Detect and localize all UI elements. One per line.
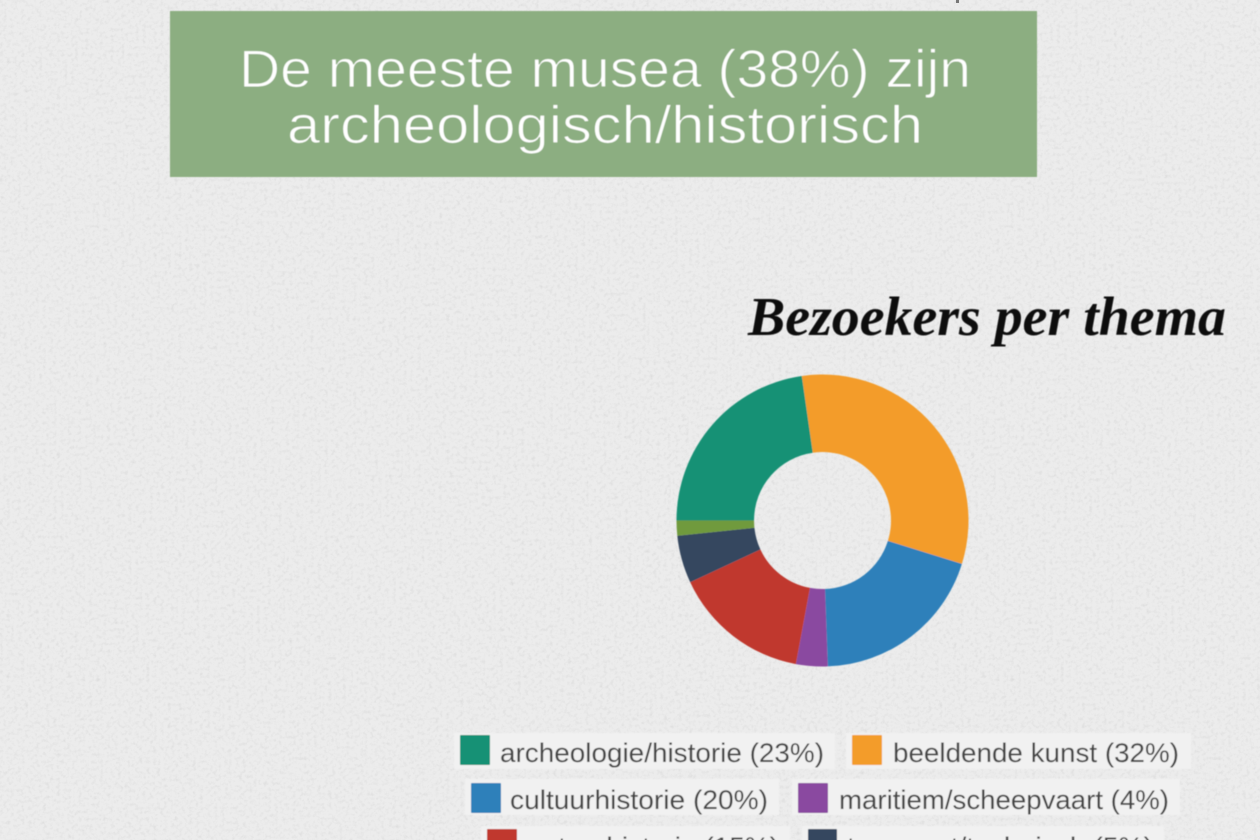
slice: maritiem/scheepvaart 4% <box>796 588 828 667</box>
slice: natuurhistorie 15% <box>690 550 810 664</box>
title text: archeologisch/historisch <box>287 96 923 155</box>
slice: beeldende kunst 32% <box>802 375 968 564</box>
top edge tick <box>956 0 959 3</box>
legend item: maritiem/scheepvaart: maritiem/scheepvaart (4%) <box>839 785 1169 815</box>
legend item: archeologie/historie: archeologie/historie (23%) <box>500 738 824 768</box>
legend item: maritiem/scheepvaart <box>792 779 1180 815</box>
legend <box>454 733 1191 840</box>
legend item: archeologie/historie <box>454 733 835 769</box>
title banner <box>170 11 1037 177</box>
chart heading: Bezoekers per thema <box>747 286 1226 347</box>
legend item: transport/technisch <box>802 826 1164 840</box>
slice: overig 1% <box>676 520 754 536</box>
legend item: natuurhistorie <box>481 826 790 840</box>
donut chart: bezoekers per thema <box>676 375 968 667</box>
legend item: beeldende kunst <box>846 733 1191 769</box>
legend item: cultuurhistorie: cultuurhistorie (20%) <box>510 785 768 815</box>
title text <box>239 40 971 155</box>
slice: archeologie/historie 23% <box>676 376 813 520</box>
slice: transport/technisch 5% <box>677 528 760 582</box>
title text: De meeste musea (38%) zijn <box>239 40 971 99</box>
slice: cultuurhistorie 20% <box>825 541 962 666</box>
legend item: cultuurhistorie <box>465 779 779 815</box>
legend item: beeldende kunst: beeldende kunst (32%) <box>893 738 1179 768</box>
